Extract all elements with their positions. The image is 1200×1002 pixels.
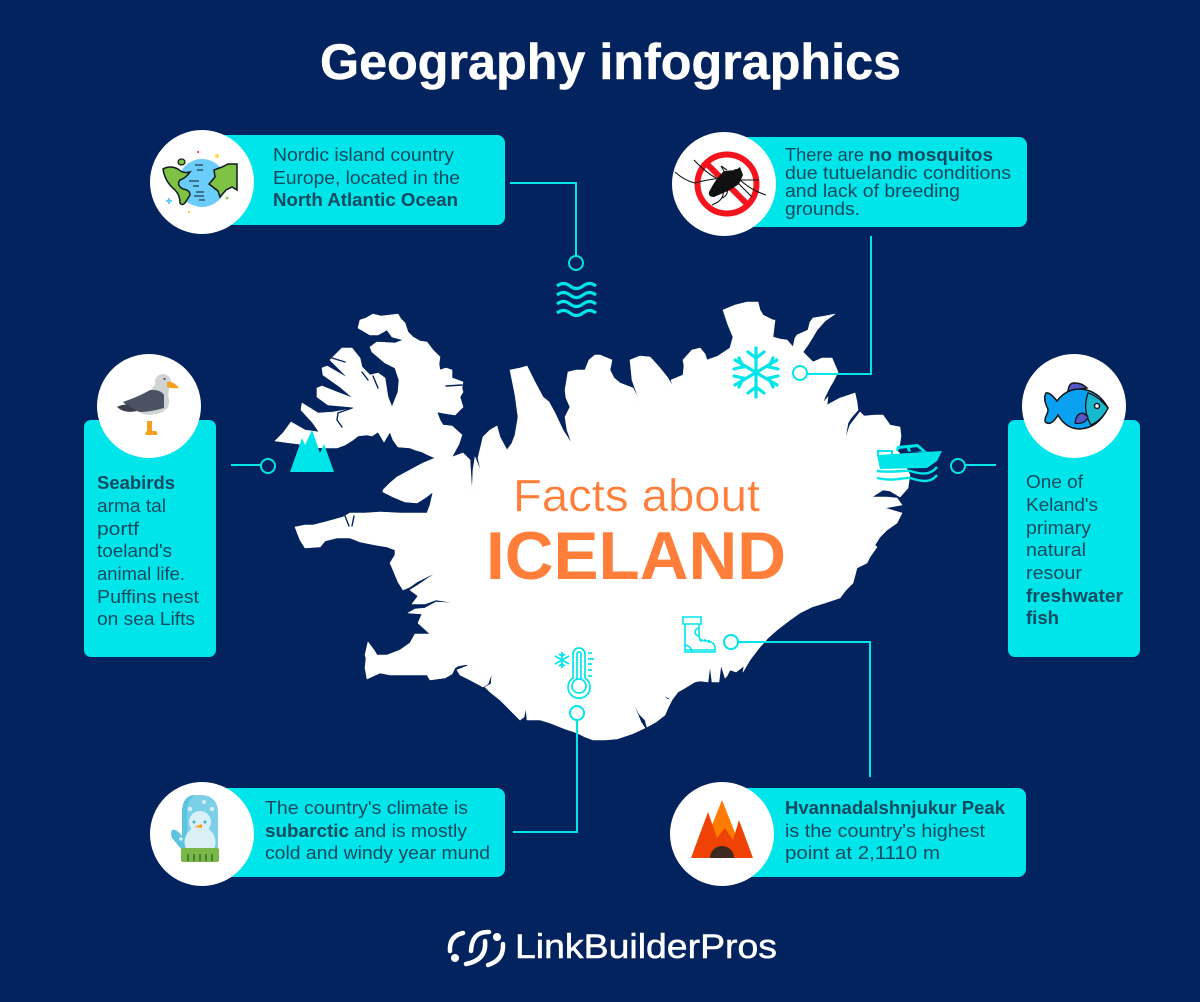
icon: ocean waves	[557, 284, 596, 316]
text: Keland's	[1026, 494, 1098, 515]
text: subarctic	[265, 820, 349, 841]
heading: facts about Iceland	[486, 470, 786, 594]
panel: location	[150, 130, 505, 234]
text: Hvannadalshnjukur Peak	[785, 797, 1006, 818]
panel: peak	[670, 782, 1026, 886]
text: and is mostly	[354, 820, 468, 841]
icon: boat	[877, 444, 942, 481]
text: Seabirds	[97, 472, 175, 493]
panel: mosquitos	[672, 132, 1027, 236]
card	[722, 137, 1027, 227]
text: point at 2,1110 m	[785, 842, 940, 863]
connector: seabirds	[231, 459, 275, 473]
logo: LinkBuilderPros: LinkBuilderPros	[515, 928, 777, 966]
text: due tutuelandic conditions	[785, 162, 1011, 183]
icon: mountains	[290, 430, 334, 472]
text: The country's climate is	[265, 797, 468, 818]
text: portf	[97, 518, 140, 539]
title: Geography infographics	[320, 34, 901, 90]
text: Nordic island country	[273, 144, 455, 165]
icon circle: fish	[1022, 354, 1126, 458]
text: fish	[1026, 607, 1059, 628]
text: and lack of breeding	[785, 180, 960, 201]
text: arma tal	[97, 495, 166, 516]
text: natural	[1026, 539, 1086, 560]
text	[1026, 471, 1123, 628]
map: Iceland outline	[275, 302, 910, 740]
text: Puffins nest	[97, 586, 199, 607]
connector: peak	[724, 635, 870, 777]
icon: thermometer	[555, 648, 594, 698]
card	[84, 420, 216, 657]
text: primary	[1026, 517, 1092, 538]
text: on sea Lifts	[97, 608, 195, 629]
text: Europe, located in the	[273, 167, 460, 188]
icon circle: volcano	[670, 782, 774, 886]
icon circle: seabird	[97, 354, 201, 458]
card	[1008, 420, 1140, 657]
heading: facts about Iceland: Facts about	[513, 470, 761, 521]
text	[785, 797, 1006, 863]
text: grounds.	[785, 198, 860, 219]
text: animal life.	[97, 563, 185, 584]
text: is the country's highest	[785, 820, 985, 841]
text: resour	[1026, 562, 1082, 583]
card	[200, 788, 505, 877]
text	[97, 472, 199, 629]
text	[273, 144, 460, 210]
icon: snowflake	[734, 348, 778, 397]
panel: fish	[1008, 354, 1140, 657]
panel: seabirds	[84, 354, 216, 657]
text: cold and windy year mund	[265, 842, 490, 863]
text: One of	[1026, 471, 1084, 492]
icon circle: no mosquitos	[672, 132, 776, 236]
icon circle: mitten	[150, 782, 254, 886]
text: toeland's	[97, 540, 172, 561]
text: North Atlantic Ocean	[273, 189, 458, 210]
logo mark	[450, 932, 503, 965]
connector: fish	[951, 459, 996, 473]
text: There are	[785, 144, 864, 165]
text	[785, 144, 1011, 219]
card	[200, 135, 505, 225]
heading: facts about Iceland: ICELAND	[486, 518, 786, 594]
connector: mosquitos	[793, 236, 871, 380]
text	[265, 797, 490, 863]
panel: climate	[150, 782, 505, 886]
connector: ocean	[510, 183, 583, 270]
text: no mosquitos	[869, 144, 993, 165]
icon: boot	[683, 617, 715, 652]
icon circle: world map	[150, 130, 254, 234]
connector: climate	[513, 706, 584, 832]
text: freshwater	[1026, 585, 1123, 606]
card	[720, 788, 1026, 877]
